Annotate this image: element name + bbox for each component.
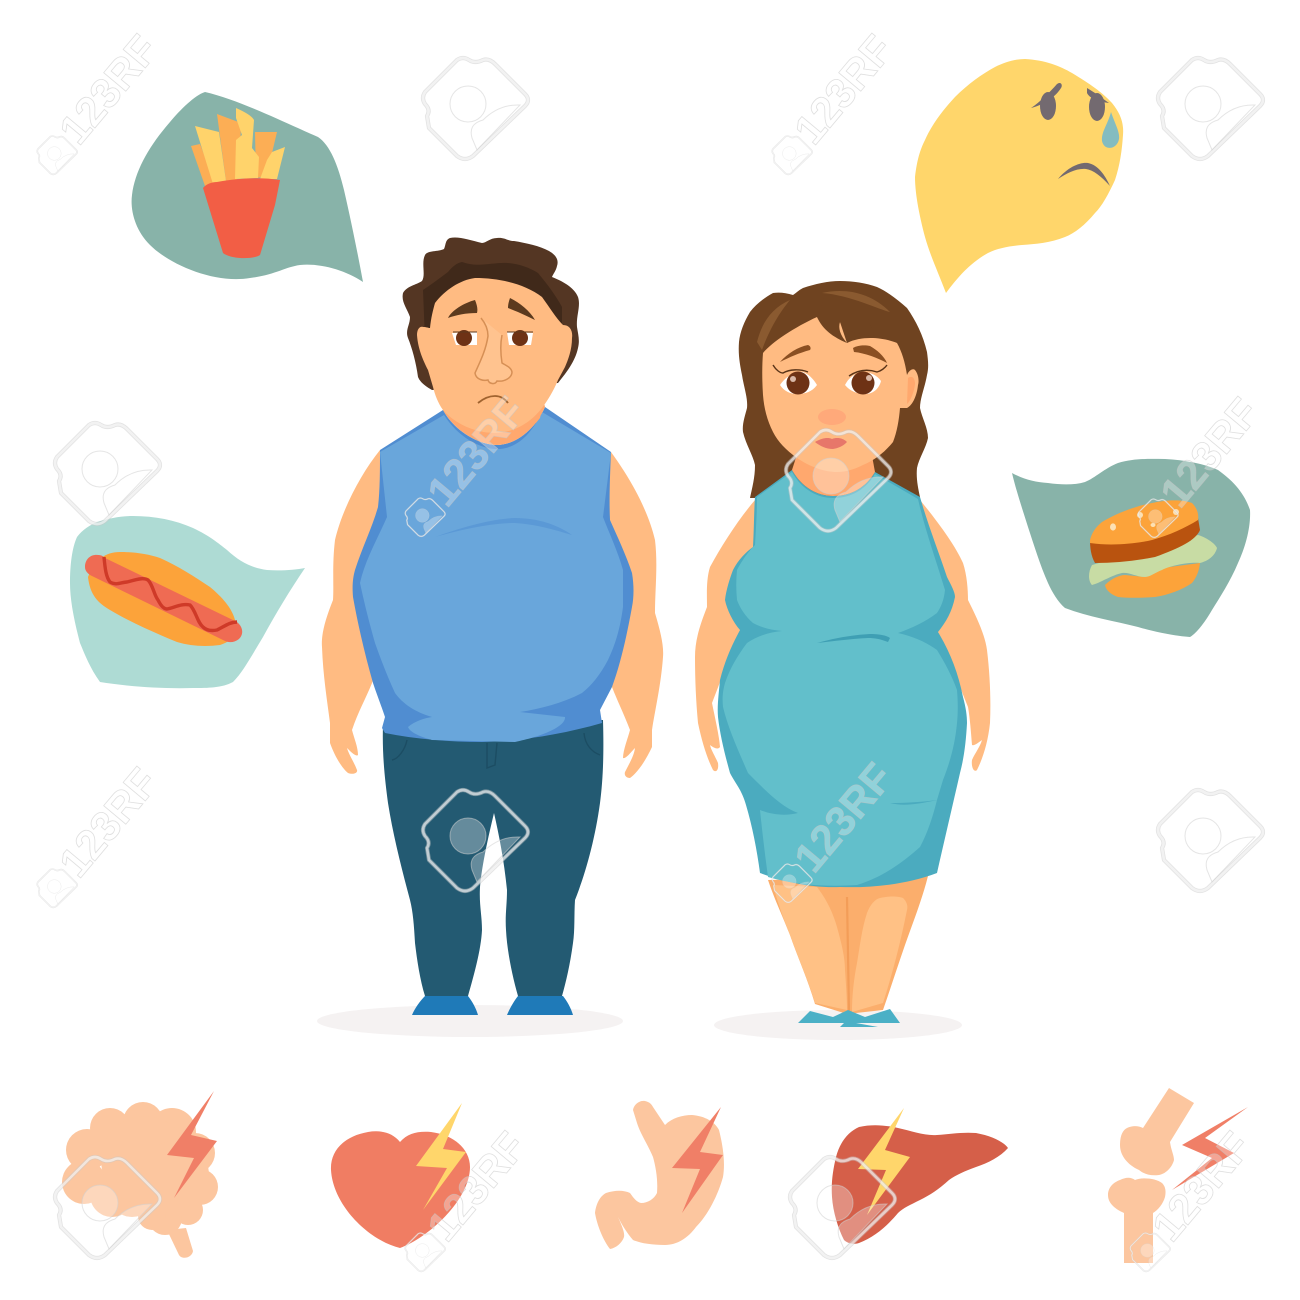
woman dress <box>718 470 967 887</box>
man shoes <box>412 996 573 1015</box>
speech bubble: sad face <box>915 59 1123 293</box>
watermarks: 123RF <box>785 754 902 881</box>
man shirt light area <box>360 412 623 742</box>
watermarks: 123RF <box>1151 389 1268 516</box>
icon: stomach with lightning <box>595 1101 724 1249</box>
man chin shadow <box>443 408 542 441</box>
watermarks: 123RF <box>50 26 167 153</box>
woman mouth <box>815 438 847 449</box>
woman head <box>757 291 919 496</box>
woman legs highlights <box>773 885 907 1012</box>
speech bubble: hot dog <box>70 516 305 688</box>
ground shadow: man <box>317 1005 623 1037</box>
character: man <box>322 237 663 1015</box>
man eyes <box>452 332 533 345</box>
man neck and collar <box>443 385 545 445</box>
speech bubble: burger <box>1012 459 1250 637</box>
man trouser pockets and fly <box>392 733 600 768</box>
woman belly crease <box>817 634 890 643</box>
woman right arm <box>900 500 990 771</box>
woman brows <box>780 345 887 363</box>
watermarks: 123RF <box>418 1123 535 1250</box>
woman dress light area <box>723 472 958 886</box>
icon: liver with lightning <box>832 1108 1008 1244</box>
man belly crease <box>435 518 572 537</box>
man left arm <box>322 450 395 774</box>
speech bubble: fries <box>132 92 363 282</box>
woman hair <box>739 281 928 498</box>
woman fringe <box>817 295 875 343</box>
brain lobes <box>62 1102 218 1258</box>
woman eyes <box>780 372 881 394</box>
woman nose <box>818 409 846 425</box>
icon: brain with lightning <box>62 1091 218 1258</box>
woman knee line <box>847 897 849 1012</box>
man head <box>403 237 579 445</box>
icon: burger <box>1089 500 1217 598</box>
man ears and face <box>417 278 572 433</box>
woman left arm <box>695 500 770 771</box>
woman face and ear <box>762 317 919 472</box>
ground shadow: woman <box>714 1010 962 1040</box>
icon: knee joint with lightning <box>1108 1088 1248 1263</box>
man brows <box>448 298 535 320</box>
man right arm <box>590 452 663 778</box>
woman hair highlights <box>757 291 890 350</box>
icon: heart with lightning <box>331 1103 470 1248</box>
woman legs <box>768 876 928 1014</box>
icon: sad face with tear <box>1031 83 1119 186</box>
man hair <box>403 237 579 390</box>
watermarks: 123RF <box>50 759 167 886</box>
character: woman <box>695 281 990 1027</box>
man t-shirt <box>353 407 634 742</box>
watermarks: 123RF <box>418 388 535 515</box>
watermarks: 123RF <box>1143 1123 1260 1250</box>
man nose <box>475 318 512 384</box>
watermarks: 123RF <box>785 26 902 153</box>
woman neck <box>792 445 875 496</box>
icon: hot dog <box>85 552 242 646</box>
woman shoes <box>798 1009 900 1027</box>
man mouth <box>478 396 508 403</box>
man trousers <box>383 720 603 996</box>
woman ear shade <box>907 377 915 404</box>
brain bolt <box>167 1091 217 1198</box>
man hair shadow <box>423 262 562 340</box>
icon: french fries <box>191 108 285 258</box>
